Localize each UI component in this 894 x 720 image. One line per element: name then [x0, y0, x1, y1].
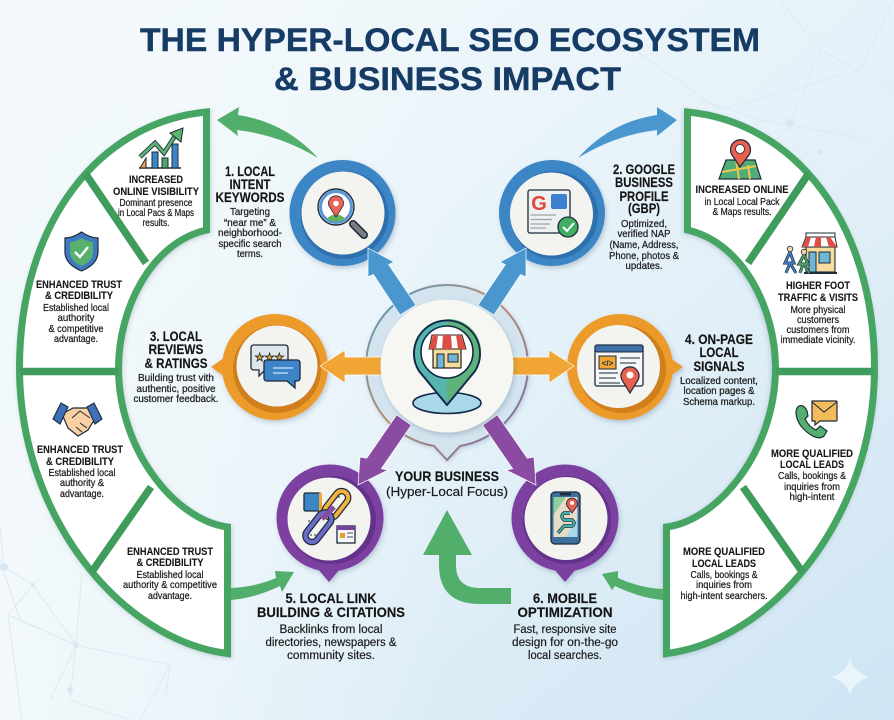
- arrow: feedback loop to hub: [423, 510, 511, 604]
- description: verified NAP: [618, 228, 670, 240]
- node 5: local link building and citations: [257, 464, 405, 662]
- impact 8: more qualified local leads: inquiries from: [696, 579, 752, 591]
- icon ring: magnifier: [290, 160, 396, 266]
- icon: map with pin: [719, 140, 761, 179]
- icon: chain link with directory and listing: [303, 488, 355, 545]
- impact 4: enhanced trust and credibility: authority & competitive: [123, 579, 217, 591]
- icon: growth chart: [139, 128, 183, 168]
- impact 7: more qualified local leads: inquiries from: [784, 481, 840, 493]
- title: [140, 22, 760, 97]
- node 2: google business profile: [499, 160, 679, 272]
- impact 8: more qualified local leads: high-intent searchers.: [680, 590, 768, 602]
- heading: BUILDING & CITATIONS: [257, 605, 405, 620]
- impact 7: more qualified local leads: LOCAL LEADS: [780, 459, 844, 471]
- impact 2: enhanced trust and credibility: ENHANCED TRUST: [36, 279, 122, 291]
- node 1: local intent keywords: [216, 160, 396, 266]
- description: authentic, positive: [136, 383, 216, 395]
- icon: phone and envelope: [796, 401, 837, 438]
- description: Building trust vith: [138, 372, 214, 384]
- description: customer feedback.: [134, 393, 218, 405]
- icon: profile card with check: G: [531, 193, 547, 215]
- icon ring: mobile: [512, 464, 618, 582]
- hub label: [386, 469, 508, 499]
- icon ring: business profile: [499, 160, 605, 266]
- impact 1: increased online visibility: ONLINE VISIBILITY: [113, 186, 200, 198]
- impact 1: increased online visibility: results.: [142, 217, 170, 229]
- icon: browser code window with pin: </>: [602, 359, 614, 368]
- center hub ring: [366, 285, 528, 460]
- heading: [613, 162, 675, 216]
- description: directories, newspapers &: [266, 637, 397, 649]
- heading: BUSINESS: [615, 175, 673, 190]
- heading: LOCAL: [700, 345, 738, 360]
- impact 3: enhanced trust and credibility: ENHANCED TRUST: [37, 444, 123, 456]
- impact 8: more qualified local leads: [680, 546, 768, 602]
- impact 1: increased online visibility: [113, 128, 200, 229]
- impact 6: higher foot traffic: More physical: [790, 304, 846, 316]
- icon: map pin with shop: [413, 319, 481, 414]
- description: [680, 375, 758, 408]
- hub label: YOUR BUSINESS: [395, 469, 499, 484]
- heading: INTENT: [230, 177, 271, 192]
- description: [609, 218, 679, 272]
- impact 1: increased online visibility: INCREASED: [129, 174, 183, 186]
- impact 4: enhanced trust and credibility: & CREDIBILITY: [136, 557, 204, 569]
- icon ring: on-page code: [567, 314, 683, 420]
- impact 6: higher foot traffic: TRAFFIC & VISITS: [778, 292, 858, 304]
- impact 6: higher foot traffic: customers: [797, 314, 839, 326]
- impact 5: increased online: [696, 140, 788, 218]
- description: [266, 624, 397, 662]
- description: Optimized,: [621, 218, 667, 230]
- arrow: keywords to left arc: [217, 107, 318, 158]
- description: [134, 372, 218, 405]
- impact 4: enhanced trust and credibility: ENHANCED TRUST: [127, 546, 213, 558]
- icon: shop with shoppers: [785, 233, 837, 274]
- description: Backlinks from local: [280, 624, 382, 636]
- arrow: google profile to right arc: [578, 107, 677, 158]
- impact 7: more qualified local leads: [771, 401, 853, 503]
- heading: PROFILE: [620, 189, 668, 204]
- heading: 1. LOCAL: [225, 164, 275, 179]
- impact 5: increased online: in Local Local Pack: [704, 196, 780, 208]
- impact 7: more qualified local leads: high-intent: [790, 491, 835, 503]
- panel: right arc of business impacts: [666, 112, 874, 654]
- impact 8: more qualified local leads: Calls, bookings &: [690, 569, 758, 581]
- node 6: mobile optimization: [512, 464, 618, 662]
- heading: 2. GOOGLE: [613, 162, 675, 177]
- description: local searches.: [528, 650, 602, 662]
- impact 8: more qualified local leads: LOCAL LEADS: [692, 558, 756, 570]
- impact 7: more qualified local leads: MORE QUALIFIED: [771, 448, 853, 460]
- description: [512, 624, 618, 662]
- heading: REVIEWS: [148, 342, 204, 357]
- panel: left arc of business impacts: [20, 112, 228, 654]
- description: Fast, responsive site: [514, 624, 616, 636]
- description: community sites.: [287, 650, 375, 662]
- impact 1: increased online visibility: in Local Pacs & Maps: [118, 207, 194, 219]
- impact 1: increased online visibility: Dominant presence: [120, 197, 193, 209]
- heading: KEYWORDS: [216, 190, 284, 205]
- heading: 3. LOCAL: [150, 329, 202, 344]
- impact 3: enhanced trust and credibility: [37, 403, 123, 500]
- description: specific search: [218, 238, 282, 250]
- impact 6: higher foot traffic: customers from: [786, 324, 850, 336]
- heading: 5. LOCAL LINK: [286, 591, 377, 606]
- description: (Name, Address,: [610, 239, 678, 251]
- impact 2: enhanced trust and credibility: advantage.: [54, 333, 98, 345]
- title: & BUSINESS IMPACT: [274, 61, 621, 97]
- impact 2: enhanced trust and credibility: authority: [58, 312, 95, 324]
- icon: speech bubbles with stars: [251, 345, 300, 388]
- impact 5: increased online: INCREASED ONLINE: [696, 184, 788, 196]
- impact 6: higher foot traffic: HIGHER FOOT: [786, 280, 850, 292]
- heading: SIGNALS: [694, 359, 744, 374]
- heading: 6. MOBILE: [533, 591, 597, 606]
- icon: handshake: [53, 403, 102, 436]
- impact 3: enhanced trust and credibility: authority &: [60, 477, 104, 489]
- impact 2: enhanced trust and credibility: & CREDIBILITY: [45, 290, 114, 302]
- icon: magnifier with pin: [318, 189, 364, 235]
- description: Targeting: [230, 206, 270, 218]
- arrow: hub to link building: [358, 415, 411, 485]
- icon ring: links: [276, 464, 384, 582]
- heading: [216, 164, 284, 205]
- arrow: hub to google business profile: [478, 248, 526, 315]
- impact 4: enhanced trust and credibility: [123, 546, 217, 602]
- icon: phone with route map: [551, 492, 580, 544]
- impact 2: enhanced trust and credibility: & competitive: [48, 323, 104, 335]
- description: Phone, photos &: [609, 250, 679, 262]
- icon ring: reviews: [211, 314, 328, 420]
- heading: [685, 332, 753, 374]
- impact 4: enhanced trust and credibility: advantage.: [148, 590, 192, 602]
- icon: speech bubbles with stars: ★★★: [255, 352, 284, 364]
- heading: OPTIMIZATION: [518, 605, 612, 620]
- impact 6: higher foot traffic: [778, 233, 858, 346]
- description: Localized content,: [680, 375, 758, 387]
- description: Schema markup.: [683, 396, 755, 408]
- arrow: hub to mobile: [483, 415, 536, 485]
- icon: browser code window with pin: [595, 345, 643, 393]
- description: location pages &: [684, 385, 754, 397]
- arrow: hub to on-page signals: [510, 350, 574, 383]
- impact 3: enhanced trust and credibility: advantage.: [60, 488, 104, 500]
- heading: & RATINGS: [144, 356, 208, 371]
- arrow: right arc to mobile: [602, 571, 663, 600]
- description: neighborhood-: [218, 227, 282, 239]
- node 4: on-page local signals: [567, 314, 758, 420]
- impact 8: more qualified local leads: MORE QUALIFIED: [683, 546, 765, 558]
- heading: [257, 591, 405, 620]
- heading: 4. ON-PAGE: [685, 332, 753, 347]
- description: “near me” &: [224, 217, 276, 229]
- arrow: hub to reviews: [320, 350, 385, 383]
- description: design for on-the-go: [512, 637, 618, 649]
- impact 5: increased online: & Maps results.: [712, 206, 772, 218]
- icon: shield: [65, 232, 98, 271]
- title: THE HYPER-LOCAL SEO ECOSYSTEM: [140, 22, 760, 58]
- description: updates.: [626, 260, 662, 272]
- description: terms.: [237, 248, 263, 260]
- description: [218, 206, 282, 260]
- arrow: hub to local keywords: [368, 248, 416, 315]
- impact 3: enhanced trust and credibility: Established local: [48, 467, 116, 479]
- impact 2: enhanced trust and credibility: [36, 232, 122, 345]
- center hub disc with business pin icon: [380, 300, 514, 432]
- heading: (GBP): [628, 201, 660, 216]
- heading: [144, 329, 208, 371]
- impact 7: more qualified local leads: Calls, bookings &: [778, 470, 846, 482]
- impact 6: higher foot traffic: immediate vicinity.: [780, 334, 856, 346]
- impact 4: enhanced trust and credibility: Established local: [136, 569, 204, 581]
- impact 2: enhanced trust and credibility: Established local: [43, 302, 109, 314]
- icon: sparkle watermark: [832, 658, 869, 695]
- arrow: left arc to link building: [231, 571, 294, 600]
- hub label: (Hyper-Local Focus): [386, 484, 508, 499]
- node 3: local reviews and ratings: [134, 314, 328, 420]
- icon: profile card with check: [528, 190, 578, 237]
- impact 3: enhanced trust and credibility: & CREDIBILITY: [46, 456, 115, 468]
- heading: [518, 591, 612, 620]
